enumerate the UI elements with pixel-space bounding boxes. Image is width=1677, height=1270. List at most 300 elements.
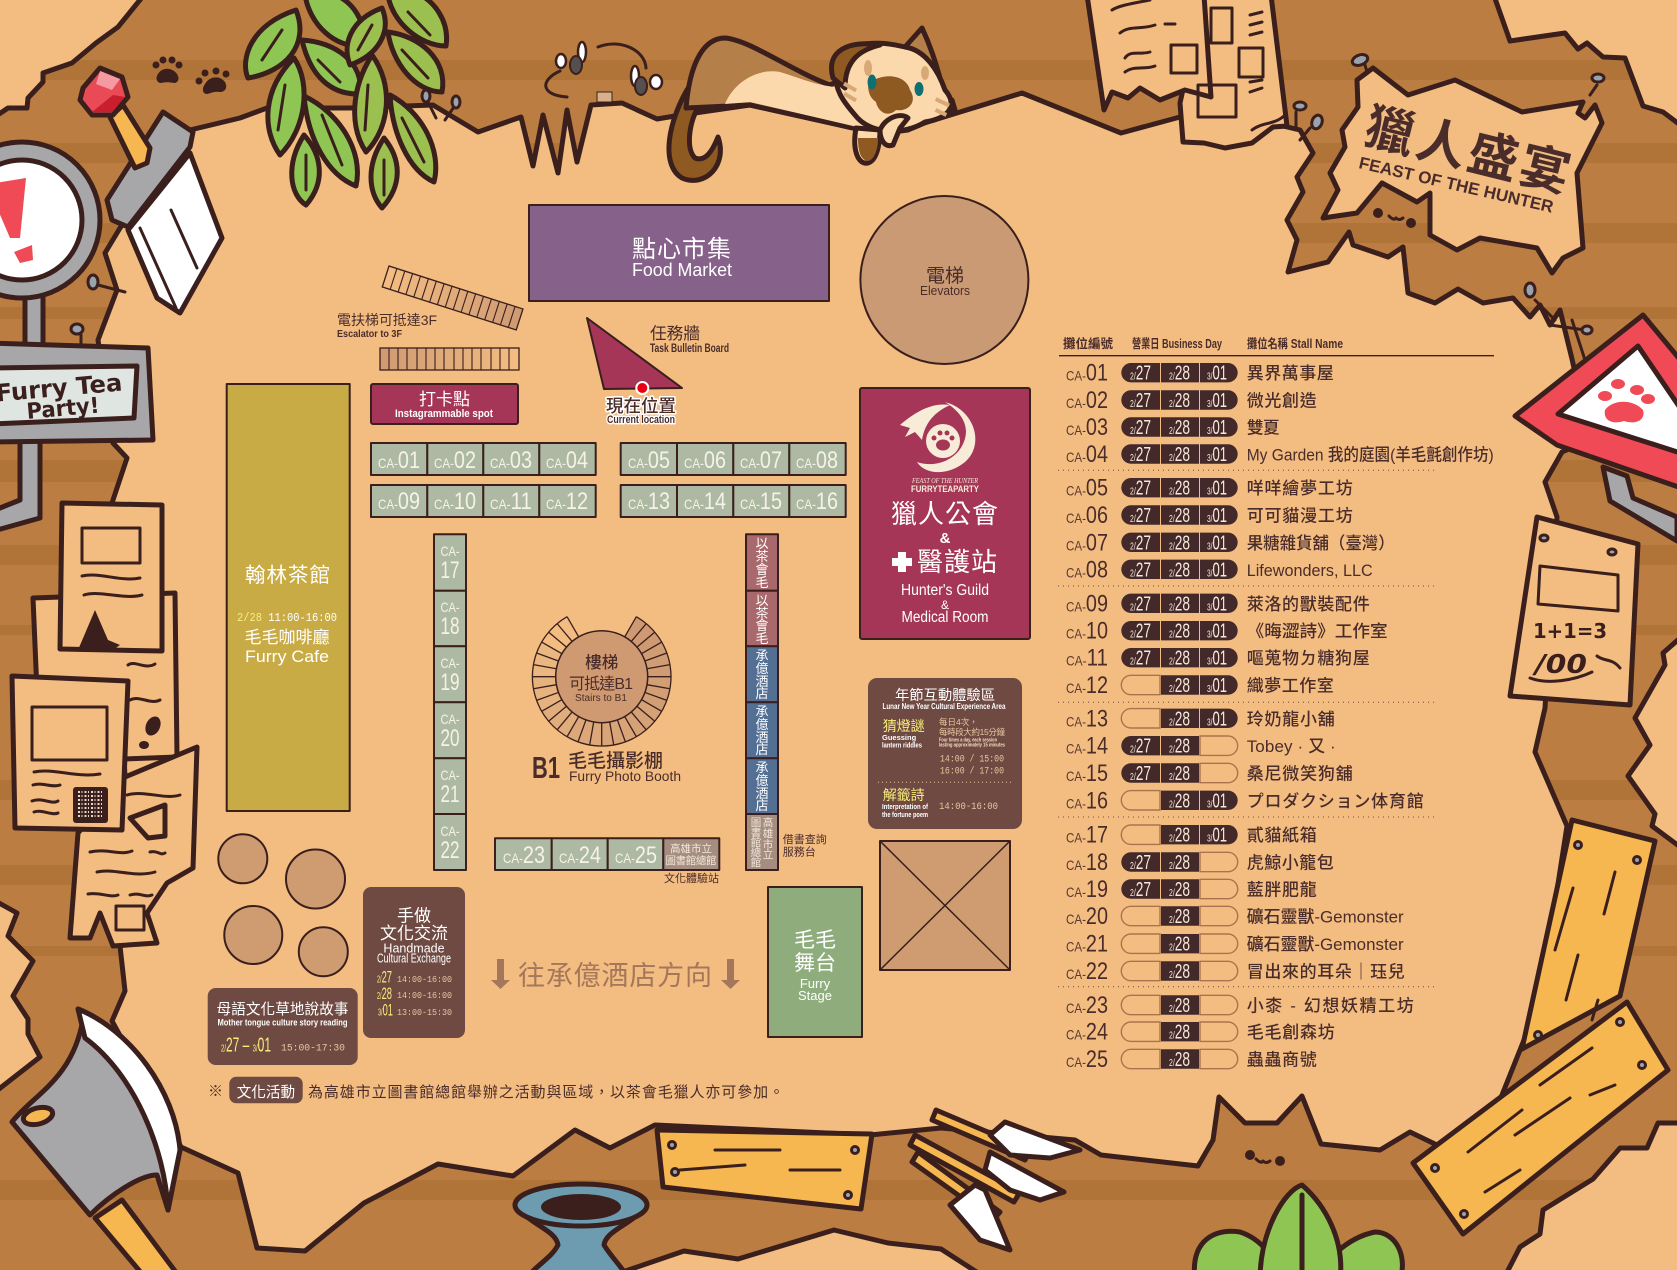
stall CA-16: CA-16 — [796, 488, 838, 515]
stall CA-14: CA-14 — [684, 488, 726, 515]
booth 以茶會毛: 以茶會毛 — [755, 536, 769, 590]
row CA-13: 2/28 — [1169, 708, 1190, 730]
stall CA-17 — [434, 534, 466, 591]
row CA-05 — [1066, 475, 1353, 502]
row CA-02: 微光創造 — [1247, 392, 1317, 410]
row CA-23 — [1066, 992, 1414, 1019]
row CA-12: 2/28 — [1169, 675, 1190, 697]
row CA-16: 2/28 — [1169, 790, 1190, 812]
schedule: 14:00-16:00 — [397, 974, 452, 985]
fortune poem en — [882, 802, 928, 819]
map: photo spot — [371, 384, 518, 424]
text: stairs line 1: 樓梯 — [585, 653, 618, 672]
row CA-25 — [1066, 1046, 1317, 1073]
row CA-08: CA-08 — [1066, 556, 1108, 583]
panel: lunar new year experience — [868, 678, 1022, 829]
row CA-04: 2/28 — [1169, 444, 1190, 466]
icon: blue vase — [515, 1184, 647, 1270]
row CA-10: 3/01 — [1207, 621, 1227, 643]
row CA-15: CA-15 — [1066, 760, 1108, 787]
schedule: 3/01 — [378, 1001, 393, 1020]
table header — [1059, 336, 1494, 356]
lantern riddles title: 猜燈謎 — [883, 718, 925, 734]
row CA-17 — [1066, 822, 1317, 849]
icon: stamp brush with gem — [80, 68, 222, 313]
fortune poem en: the fortune poem — [882, 810, 928, 819]
lantern times — [940, 754, 1004, 777]
row CA-10: CA-10 — [1066, 618, 1108, 645]
logo — [900, 402, 975, 472]
lantern schedule note: lasting approximately 15 minutes — [939, 743, 1005, 749]
row CA-01: 異界萬事屋 — [1247, 364, 1334, 383]
row CA-21 — [1066, 931, 1404, 958]
icon: medical cross — [892, 552, 912, 572]
stall CA-22 — [434, 814, 466, 870]
text cn: 毛毛攝影棚 — [568, 750, 663, 772]
stall CA-20 — [434, 702, 466, 758]
fortune poem en: Interpretation of — [882, 802, 928, 811]
row CA-09: 3/01 — [1207, 593, 1227, 615]
heading en: Handmade — [383, 942, 445, 956]
row CA-09: 萊洛的獸裝配件 — [1247, 595, 1370, 614]
stall CA-13: CA-13 — [628, 488, 670, 515]
table header: 攤位名稱 Stall Name — [1247, 336, 1343, 351]
fortune poem title: 解籤詩 — [883, 787, 925, 803]
row CA-11: 2/28 — [1169, 648, 1190, 670]
row CA-22: 2/28 — [1169, 961, 1190, 983]
label en: Escalator to 3F — [337, 329, 402, 340]
library booth: 高雄市立 — [670, 842, 712, 855]
row CA-25: CA-25 — [1066, 1046, 1108, 1073]
text cn: 現在位置 — [606, 396, 676, 416]
title chinese: 獵人盛宴 — [1359, 98, 1579, 204]
row CA-03: CA-03 — [1066, 414, 1108, 441]
text en: Furry — [800, 976, 831, 991]
label: book inquiry desk: 借書查詢 — [783, 832, 827, 846]
row CA-03: 2/28 — [1169, 417, 1190, 439]
map: coffee house — [227, 384, 350, 811]
row CA-14: Tobey · 又 · — [1247, 737, 1336, 756]
row CA-13 — [1066, 705, 1335, 732]
fortune poem time: 14:00-16:00 — [939, 801, 998, 813]
row CA-07: 2/27 — [1130, 532, 1151, 554]
stall CA-19: 19 — [440, 669, 460, 696]
row CA-22: 冒出來的耳朵｜珏兒 — [1247, 962, 1405, 982]
row CA-12 — [1066, 672, 1334, 699]
row CA-19: 2/28 — [1169, 879, 1190, 901]
lantern riddles en — [882, 733, 922, 750]
stall CA-18: CA- — [440, 599, 460, 615]
icon: right pinned card — [1510, 517, 1638, 705]
row CA-10: 《晦澀詩》工作室 — [1247, 621, 1388, 641]
lantern riddles en: lantern riddles — [882, 740, 922, 750]
row CA-03: 2/27 — [1130, 417, 1151, 439]
lantern schedule note — [939, 717, 1005, 749]
title sign — [1323, 68, 1602, 273]
stalls: row CA-23 to CA-25 — [495, 838, 719, 870]
label: book inquiry desk — [783, 832, 827, 858]
booth library: 圖書館總館 — [751, 817, 762, 869]
row CA-12: 織夢工作室 — [1247, 676, 1334, 696]
row CA-16: CA-16 — [1066, 787, 1108, 814]
icon: magnifier alert — [0, 142, 100, 347]
row CA-14: 2/27 — [1130, 736, 1151, 758]
stall CA-05 — [621, 443, 677, 475]
schedule: 2/28 — [377, 984, 392, 1003]
panel: handmade culture — [363, 887, 465, 1038]
stall CA-24: CA-24 — [559, 842, 601, 869]
booth 承億酒店 second — [746, 702, 778, 758]
schedule: 2/27 — [377, 968, 392, 987]
row CA-05: 2/27 — [1130, 478, 1151, 500]
stalls: row CA-05 to CA-08 — [621, 443, 846, 475]
row CA-19: CA-19 — [1066, 876, 1108, 903]
booth 以茶會毛 second — [746, 591, 778, 646]
row CA-11: CA-11 — [1066, 645, 1108, 672]
booth 承億酒店: 承億酒店 — [755, 648, 769, 701]
stall CA-20: CA- — [440, 711, 460, 727]
heading cn: 手做 — [397, 907, 431, 926]
stall CA-09 — [371, 485, 427, 517]
stall CA-11 — [483, 485, 539, 517]
panel: mother tongue story reading — [208, 988, 358, 1065]
row CA-02: CA-02 — [1066, 387, 1108, 414]
stall CA-23: CA-23 — [503, 842, 545, 869]
stall CA-07: CA-07 — [740, 447, 782, 474]
stalls: column CA-17 to CA-22 — [434, 534, 466, 870]
row CA-06: CA-06 — [1066, 502, 1108, 529]
row CA-02: 2/27 — [1130, 390, 1151, 412]
direction to hotel — [491, 959, 740, 991]
torn corner: top right — [1492, 0, 1677, 130]
torn corner: top left — [0, 0, 148, 120]
stall CA-22: 22 — [440, 837, 460, 864]
stall CA-13 — [621, 485, 677, 517]
map: escalator lower — [380, 348, 519, 370]
text cn — [794, 929, 836, 975]
row CA-05: 2/28 — [1169, 478, 1190, 500]
torn patch: left edge — [0, 898, 40, 1096]
icon: small pins left — [71, 275, 125, 345]
icon: pins near title — [1294, 53, 1604, 140]
map: escalator upper — [382, 266, 523, 330]
row CA-04 — [1066, 441, 1494, 468]
dates: 2/27 – 3/01 — [221, 1035, 271, 1057]
arrow right — [721, 959, 740, 989]
text cn: 任務牆 — [650, 324, 700, 343]
icon: arrows — [910, 1110, 1080, 1250]
row CA-08 — [1066, 556, 1373, 583]
note tag: 文化活動 — [237, 1084, 295, 1101]
text en: Stage — [798, 988, 832, 1003]
row CA-12: 3/01 — [1207, 675, 1227, 697]
row CA-20: 礦石靈獸-Gemonster — [1247, 908, 1404, 926]
row CA-06: 2/27 — [1130, 505, 1151, 527]
icon: hanging leaves left vine — [246, 0, 363, 205]
text en guild: Hunter's Guild — [901, 582, 989, 599]
text cn: 毛毛 — [794, 929, 836, 952]
row CA-11 — [1066, 645, 1370, 672]
text en: Current location — [607, 414, 675, 426]
stall CA-12 — [539, 485, 596, 517]
row CA-05: CA-05 — [1066, 475, 1108, 502]
stall CA-03: CA-03 — [490, 447, 532, 474]
stalls: row CA-01 to CA-04 — [371, 443, 596, 475]
row CA-24: 2/28 — [1169, 1022, 1190, 1044]
schedule: 14:00-16:00 — [397, 990, 452, 1001]
logo caption: FEAST OF THE HUNTER — [911, 477, 979, 485]
row CA-08: 3/01 — [1207, 559, 1227, 581]
row CA-25: 2/28 — [1169, 1049, 1190, 1071]
note — [208, 1077, 784, 1103]
row CA-21: CA-21 — [1066, 931, 1108, 958]
icon: bottom plank — [657, 1130, 872, 1209]
stall CA-21: CA- — [440, 767, 460, 783]
text en: Furry Photo Booth — [569, 768, 681, 784]
schedule: 13:00-15:30 — [397, 1007, 452, 1018]
row CA-11: 嘔蒐物ㄉ糖狗屋 — [1247, 649, 1370, 668]
row CA-10 — [1066, 618, 1388, 645]
text cn: 舞台 — [794, 952, 836, 975]
heading cn: 文化交流 — [380, 924, 448, 943]
label: B1 photo booth: B1 — [532, 750, 560, 785]
row CA-07: 果糖雜貨舖（臺灣） — [1247, 534, 1395, 553]
row CA-07: 2/28 — [1169, 532, 1190, 554]
map: crossed box — [880, 841, 1010, 970]
stall CA-14 — [677, 485, 733, 517]
icon: pinned cards left — [12, 503, 197, 946]
stall CA-21: 21 — [440, 781, 460, 808]
icon: hanging leaves right vine — [347, 0, 447, 208]
text en: Task Bulletin Board — [650, 341, 729, 355]
row CA-02 — [1066, 387, 1317, 414]
icon: pins at triangle — [1525, 283, 1592, 360]
stall CA-17: CA- — [440, 543, 460, 559]
table header: 營業日 Business Day — [1132, 336, 1222, 351]
icon: cat on ledge — [669, 28, 955, 180]
row CA-06: 2/28 — [1169, 505, 1190, 527]
label: cultural station: 文化體驗站 — [664, 871, 719, 885]
row CA-20: 2/28 — [1169, 906, 1190, 928]
row CA-23: 小桼 - 幻想妖精工坊 — [1247, 996, 1414, 1016]
label: furry cafe en: Furry Cafe — [245, 647, 329, 666]
card score: /00 — [1532, 650, 1587, 680]
stall CA-18 — [434, 591, 466, 646]
row CA-09 — [1066, 590, 1370, 617]
row CA-10: 2/28 — [1169, 621, 1190, 643]
icon: bottom cat face — [1245, 1150, 1285, 1166]
row CA-09: CA-09 — [1066, 590, 1108, 617]
stalls: row CA-13 to CA-16 — [621, 485, 846, 517]
row CA-01: 2/27 — [1130, 363, 1151, 385]
booth 以茶會毛 — [746, 534, 778, 591]
row CA-16: 3/01 — [1207, 790, 1227, 812]
cat face under title — [1373, 208, 1416, 228]
torn corner: bottom right — [1503, 1123, 1677, 1270]
stall CA-01 — [371, 443, 427, 475]
sign text second line: Party! — [26, 394, 100, 425]
map: spiral stairs — [523, 598, 680, 755]
row CA-25: 蟲蟲商號 — [1247, 1050, 1317, 1070]
icon: wooden planks right — [1413, 820, 1668, 1234]
stall CA-25: CA-25 — [615, 842, 657, 869]
row CA-14 — [1066, 733, 1336, 760]
row CA-22 — [1066, 958, 1405, 985]
opening hours: 2/28 11:00-16:00 — [237, 612, 337, 625]
row CA-19: 藍胖肥龍 — [1247, 880, 1317, 900]
sign: Furry Tea Party — [0, 343, 153, 532]
stall CA-19 — [434, 646, 466, 702]
text: stairs en: Stairs to B1 — [575, 693, 627, 704]
library booth — [663, 838, 719, 870]
row CA-15 — [1066, 760, 1353, 787]
heading en: Mother tongue culture story reading — [218, 1018, 348, 1029]
stall CA-19: CA- — [440, 655, 460, 671]
row CA-06: 3/01 — [1207, 505, 1227, 527]
map: elevators — [860, 196, 1028, 364]
table header: 攤位編號 — [1063, 336, 1113, 351]
heading cn — [380, 907, 448, 943]
text cn: 電梯 — [926, 265, 964, 287]
text en: Elevators — [920, 283, 970, 298]
stall CA-08 — [789, 443, 846, 475]
stall CA-02: CA-02 — [434, 447, 476, 474]
row CA-18 — [1066, 849, 1334, 876]
row CA-24 — [1066, 1019, 1335, 1046]
stall CA-15: CA-15 — [740, 488, 782, 515]
row CA-07 — [1066, 529, 1395, 556]
icon: flies — [546, 42, 662, 102]
booth 以茶會毛 second: 以茶會毛 — [755, 593, 769, 646]
lantern schedule note: Four times a day, each session — [939, 738, 997, 744]
lantern riddles en: Guessing — [882, 733, 917, 742]
label: escalator — [337, 312, 437, 340]
row CA-15: 2/28 — [1169, 763, 1190, 785]
torn patch: bottom centre — [599, 1230, 989, 1270]
row CA-19 — [1066, 876, 1317, 903]
row CA-04: My Garden 我的庭園(羊毛氈創作坊) — [1247, 446, 1494, 464]
icon: warning triangle sign — [1515, 315, 1677, 541]
row CA-09: 2/28 — [1169, 593, 1190, 615]
heading: hunter guild: 獵人公會 — [891, 499, 999, 529]
stall CA-17: 17 — [440, 557, 460, 584]
row CA-17: 貳貓紙箱 — [1247, 826, 1317, 845]
row CA-13: 玲奶龍小舖 — [1247, 710, 1335, 729]
lantern times: 16:00 / 17:00 — [940, 765, 1004, 777]
arrow left — [491, 959, 510, 989]
row CA-13: CA-13 — [1066, 705, 1108, 732]
row CA-18: CA-18 — [1066, 849, 1108, 876]
text en amp: & — [941, 598, 949, 612]
lantern schedule note: 每時段大約15分鐘 — [939, 727, 1005, 737]
icon: bottom leaves — [1194, 1185, 1402, 1270]
row CA-02: 2/28 — [1169, 390, 1190, 412]
row CA-11: 3/01 — [1207, 648, 1227, 670]
stall CA-20: 20 — [440, 725, 460, 752]
row CA-17: 3/01 — [1207, 825, 1227, 847]
row CA-17: 2/28 — [1169, 825, 1190, 847]
icon: pins by leaves — [422, 90, 460, 120]
text en — [798, 976, 832, 1003]
row CA-01: 3/01 — [1207, 363, 1227, 385]
row CA-08: 2/28 — [1169, 559, 1190, 581]
row CA-23: CA-23 — [1066, 992, 1108, 1019]
library booth: 圖書館總館 — [666, 854, 716, 867]
row CA-24: CA-24 — [1066, 1019, 1108, 1046]
stall CA-21 — [434, 758, 466, 814]
stalls: column organisers — [746, 534, 778, 870]
stall CA-04 — [539, 443, 596, 475]
row CA-06: 可可貓漫工坊 — [1247, 506, 1353, 526]
logo name: FURRYTEAPARTY — [911, 484, 979, 494]
map: task bulletin board — [587, 318, 729, 389]
lantern times: 14:00 / 15:00 — [940, 754, 1004, 766]
stall CA-22: CA- — [440, 823, 460, 839]
icon: axe — [12, 1009, 180, 1270]
row CA-10: 2/27 — [1130, 621, 1151, 643]
heading: 年節互動體驗區 — [895, 686, 995, 704]
table: stall list — [1058, 336, 1494, 1073]
stall CA-06 — [677, 443, 733, 475]
note text: 為高雄市立圖書館總館舉辦之活動與區域，以茶會毛獵人亦可參加。 — [308, 1084, 784, 1101]
booth library — [746, 814, 778, 870]
text: stairs line 2: 可抵達B1 — [569, 675, 633, 693]
card text: 1+1=3 — [1533, 619, 1607, 643]
label: B1 photo booth — [532, 750, 681, 785]
row CA-01: 2/28 — [1169, 363, 1190, 385]
row CA-14: 2/28 — [1169, 736, 1190, 758]
row CA-13: 3/01 — [1207, 708, 1227, 730]
booth 承億酒店 third: 承億酒店 — [755, 760, 769, 813]
row CA-16 — [1066, 787, 1424, 814]
row CA-09: 2/27 — [1130, 593, 1151, 615]
row CA-03: 3/01 — [1207, 417, 1227, 439]
schedule — [377, 968, 452, 1020]
row CA-07: 3/01 — [1207, 532, 1227, 554]
row CA-15: 桑尼微笑狗舖 — [1247, 764, 1353, 784]
row CA-22: CA-22 — [1066, 958, 1108, 985]
stalls: row CA-09 to CA-12 — [371, 485, 596, 517]
row CA-18: 2/28 — [1169, 852, 1190, 874]
stall CA-08: CA-08 — [796, 447, 838, 474]
heading en: Cultural Exchange — [377, 952, 451, 966]
marker: current location — [606, 382, 676, 426]
row CA-05: 3/01 — [1207, 478, 1227, 500]
map: round tables — [218, 834, 348, 976]
ampersand: & — [940, 530, 951, 547]
heading en: Lunar New Year Cultural Experience Area — [882, 702, 1006, 711]
stall CA-09: CA-09 — [378, 488, 420, 515]
map: furry stage — [768, 887, 862, 1037]
row CA-08: Lifewonders, LLC — [1247, 561, 1373, 580]
direction text: 往承億酒店方向 — [518, 961, 712, 991]
text en: Food Market — [632, 260, 732, 280]
row CA-04: 2/27 — [1130, 444, 1151, 466]
booth 承億酒店 third — [746, 758, 778, 814]
row CA-04: 3/01 — [1207, 444, 1227, 466]
booth 承億酒店 second: 承億酒店 — [755, 704, 769, 757]
stall CA-04: CA-04 — [546, 447, 588, 474]
note: ※ — [208, 1083, 223, 1100]
icon: paw prints — [152, 56, 230, 94]
row CA-07: CA-07 — [1066, 529, 1108, 556]
heading cn: 母語文化草地說故事 — [216, 1001, 348, 1018]
row CA-03 — [1066, 414, 1280, 441]
text cn: 打卡點 — [419, 390, 470, 409]
heading: 翰林茶館: 翰林茶館 — [245, 564, 331, 587]
row CA-17: CA-17 — [1066, 822, 1108, 849]
stall CA-11: CA-11 — [490, 488, 532, 515]
